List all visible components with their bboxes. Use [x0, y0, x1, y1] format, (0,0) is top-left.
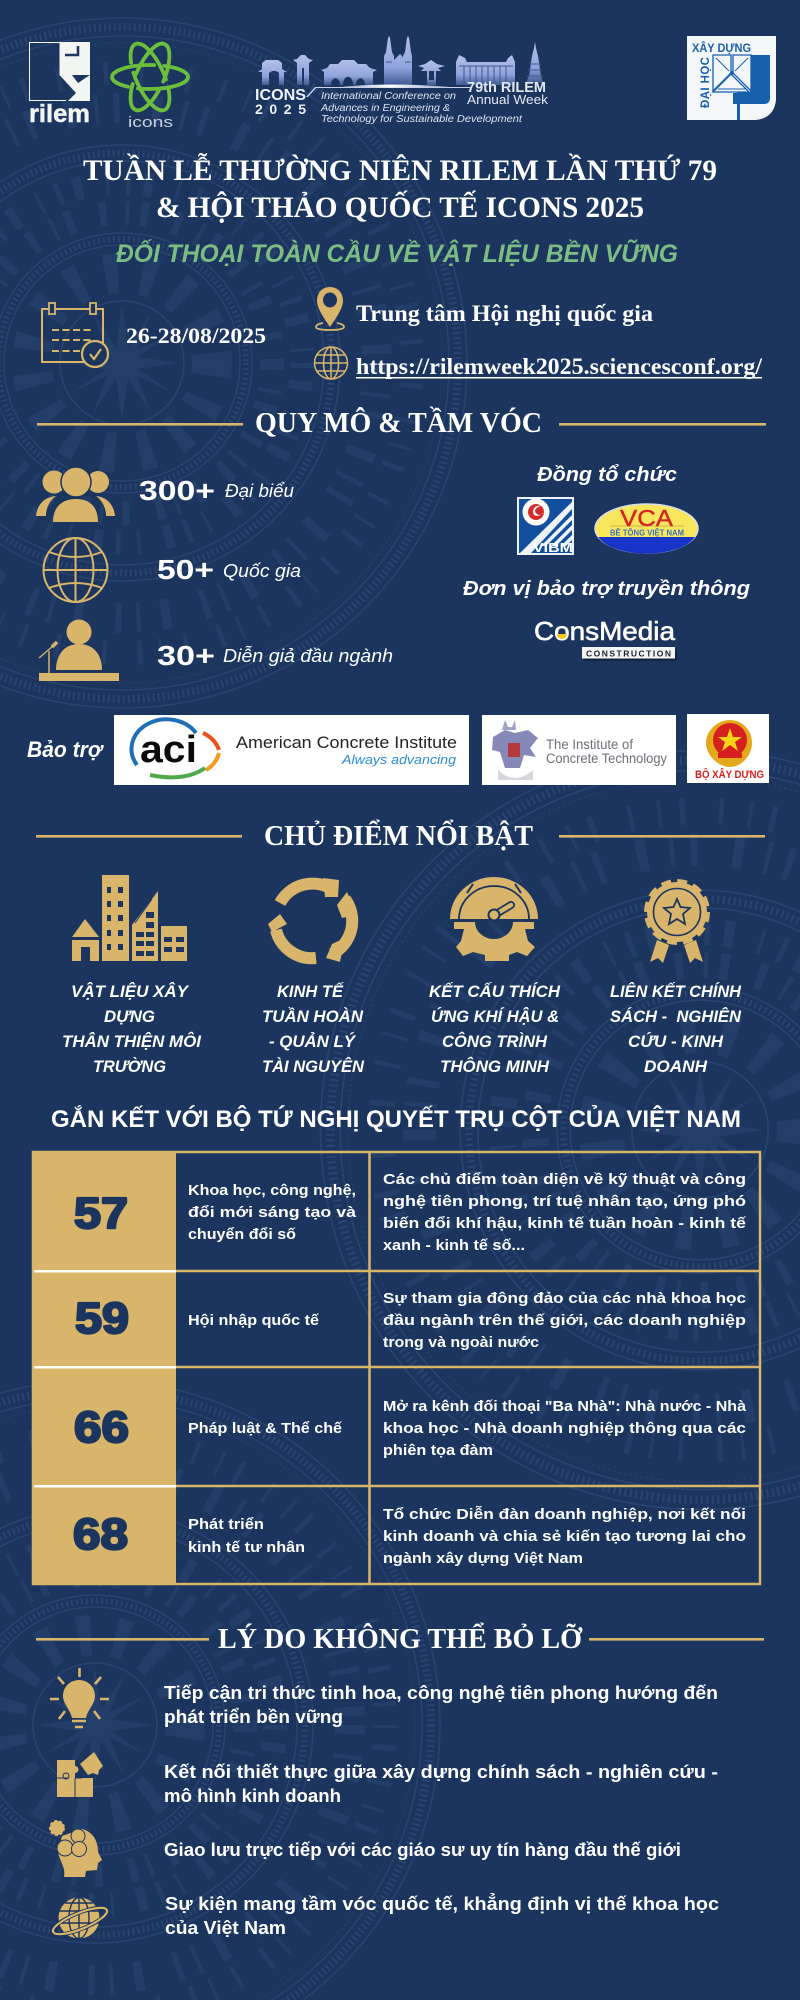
- row: resolution 57: 57: [74, 1189, 128, 1238]
- theme: climate-adaptive structures: KẾT CẤU THÍCH: [429, 982, 561, 1001]
- row: resolution 68: kinh tế tư nhân: [188, 1539, 305, 1556]
- reason: knowledge: [50, 1668, 718, 1727]
- logo: Đại học Xây dựng: [687, 36, 776, 120]
- icon: people: [36, 467, 115, 522]
- title: & HỘI THẢO QUỐC TẾ ICONS 2025: [156, 190, 644, 224]
- row: resolution 57: nghệ tiên phong, trí tuệ nhân tạo, ứng phó: [383, 1193, 746, 1210]
- row: resolution 66: Mở ra kênh đối thoại "Ba Nhà": Nhà nước - Nhà: [383, 1398, 747, 1415]
- stat: 30+ speakers: Diễn giả đầu ngành: [223, 646, 393, 666]
- logo: ICONS 2025 and 79th RILEM Annual Week: Advances in Engineering &: [320, 103, 450, 114]
- icon: location pin: [316, 287, 344, 330]
- logo: ICONS 2025 and 79th RILEM Annual Week: 2025: [255, 101, 306, 117]
- heading: four pillar resolutions: GẮN KẾT VỚI BỘ TỨ NGHỊ QUYẾT TRỤ CỘT CỦA VIỆT NAM: [51, 1104, 741, 1133]
- logo: ConsMedia: ConsMedia: [534, 616, 676, 646]
- row: resolution 68: 68: [73, 1510, 128, 1559]
- logo: Bộ Xây dựng: [687, 714, 769, 783]
- stat: 50+ countries: Quốc gia: [223, 561, 301, 581]
- logo: ICONS 2025 and 79th RILEM Annual Week: ICONS: [255, 87, 306, 104]
- row: resolution 57: xanh - kinh tế số...: [383, 1237, 525, 1254]
- theme: policy, research, business links: CỨU - KINH: [628, 1032, 724, 1051]
- row: resolution 57: [74, 1171, 747, 1254]
- logo: ICONS 2025 and 79th RILEM Annual Week: 79th RILEM: [467, 79, 546, 96]
- title: TUẦN LỄ THƯỜNG NIÊN RILEM LẦN THỨ 79: [83, 153, 717, 187]
- theme: green building materials: VẬT LIỆU XÂY: [71, 982, 190, 1001]
- theme: circular economy: - QUẢN LÝ: [269, 1032, 357, 1051]
- theme: circular economy: [262, 878, 365, 1076]
- logo: American Concrete Institute: [114, 715, 469, 785]
- theme: climate-adaptive structures: THÔNG MINH: [440, 1057, 550, 1076]
- row: resolution 68: ngành xây dựng Việt Nam: [383, 1550, 583, 1567]
- logo: Bộ Xây dựng: BỘ XÂY DỰNG: [695, 768, 764, 781]
- logo: ConsMedia: CONSTRUCTION: [586, 648, 671, 658]
- logo: Đại học Xây dựng: XÂY DỰNG: [692, 40, 751, 55]
- row: resolution 57: đổi mới sáng tạo và: [188, 1204, 357, 1221]
- logo: Institute of Concrete Technology: The Institute of: [546, 737, 633, 752]
- table: resolutions: [32, 1151, 760, 1585]
- stat: 300+ delegates: 300+: [139, 475, 215, 506]
- theme: policy, research, business links: [610, 881, 742, 1076]
- logo: VCA: BÊ TÔNG VIỆT NAM: [610, 528, 684, 538]
- venue: Trung tâm Hội nghị quốc gia: [356, 301, 654, 326]
- theme: green building materials: DỰNG: [104, 1008, 155, 1026]
- stat: 50+ countries: [44, 538, 301, 602]
- reason: connections: [57, 1752, 718, 1806]
- logo: Institute of Concrete Technology: [482, 715, 676, 785]
- row: resolution 59: Hội nhập quốc tế: [188, 1312, 320, 1329]
- section heading: Lý do không thể bỏ lỡ: LÝ DO KHÔNG THỂ BỎ LỠ: [218, 1623, 583, 1655]
- row: resolution 59: trong và ngoài nước: [383, 1334, 539, 1351]
- section heading: Chủ điểm nổi bật: CHỦ ĐIỂM NỔI BẬT: [264, 820, 533, 852]
- reason: international stature: Sự kiện mang tầm vóc quốc tế, khẳng định vị thế khoa học: [165, 1893, 719, 1914]
- icon: puzzle: [57, 1752, 103, 1797]
- event date: 26-28/08/2025: [126, 323, 266, 348]
- section heading: Quy mô & tầm vóc: QUY MÔ & TẦM VÓC: [255, 407, 542, 439]
- theme: climate-adaptive structures: CÔNG TRÌNH: [442, 1032, 548, 1051]
- reason: knowledge: Tiếp cận tri thức tinh hoa, công nghệ tiên phong hướng đến: [164, 1682, 718, 1703]
- row: resolution 68: Tổ chức Diễn đàn doanh nghiệp, nơi kết nối: [383, 1506, 746, 1523]
- row: resolution 68: kinh doanh và chia sẻ kiến tạo tương lai cho: [383, 1528, 746, 1545]
- logo: ICONS 2025 and 79th RILEM Annual Week: Annual Week: [467, 92, 549, 107]
- heading: media partner: Đơn vị bảo trợ truyền thông: [463, 578, 750, 600]
- theme: circular economy: KINH TẾ: [277, 982, 344, 1001]
- row: resolution 66: phiên tọa đàm: [383, 1442, 493, 1459]
- theme: circular economy: TUẦN HOÀN: [262, 1007, 364, 1026]
- logo: American Concrete Institute: aci: [140, 729, 197, 771]
- stat: 50+ countries: 50+: [157, 554, 214, 585]
- heading: co-organizers: Đồng tổ chức: [537, 464, 677, 486]
- theme: climate-adaptive structures: ỨNG KHÍ HẬU &: [431, 1007, 559, 1026]
- title: [83, 153, 717, 224]
- icon: gauge and gear: [450, 877, 538, 961]
- reason: connections: Kết nối thiết thực giữa xây dựng chính sách - nghiên cứu -: [164, 1761, 718, 1782]
- logo: RILEM: rilem: [29, 100, 90, 128]
- icon: award medal: [646, 881, 708, 963]
- logo: Đại học Xây dựng: ĐẠI HỌC: [700, 57, 712, 108]
- logo: Institute of Concrete Technology: Concrete Technology: [546, 751, 667, 766]
- stat: 300+ delegates: [36, 467, 294, 522]
- row: resolution 66: khoa học - Nhà doanh nghiệp thông qua các: [383, 1420, 746, 1437]
- reason: connections: mô hình kinh doanh: [164, 1785, 341, 1806]
- row: resolution 68: Phát triển: [188, 1516, 264, 1533]
- theme: green building materials: THÂN THIỆN MÔI: [62, 1032, 201, 1051]
- reason: international stature: [49, 1893, 719, 1940]
- row: resolution 59: 59: [75, 1294, 129, 1343]
- logo: ConsMedia: [534, 616, 677, 661]
- row: resolution 57: Các chủ điểm toàn diện về kỹ thuật và công: [383, 1171, 746, 1188]
- row: resolution 59: đầu ngành trên thế giới, các doanh nghiệp: [383, 1312, 746, 1329]
- theme: green building materials: [62, 875, 201, 1076]
- theme: circular economy: TÀI NGUYÊN: [262, 1057, 365, 1076]
- theme: policy, research, business links: DOANH: [644, 1058, 708, 1076]
- logo: ICONS 2025 and 79th RILEM Annual Week: International Conference on: [321, 91, 456, 102]
- logo: RILEM: [29, 42, 90, 128]
- icon: light bulb: [50, 1668, 109, 1727]
- row: resolution 68: [73, 1506, 746, 1567]
- logo: ICONS 2025 and 79th RILEM Annual Week: [255, 36, 549, 125]
- row: resolution 57: chuyển đổi số: [188, 1226, 296, 1243]
- logo: VIBM: [517, 497, 574, 555]
- row: resolution 59: [75, 1290, 746, 1351]
- logo: American Concrete Institute: American Concrete Institute: [236, 733, 457, 752]
- icon: web globe: [314, 347, 348, 379]
- theme: policy, research, business links: LIÊN KẾT CHÍNH: [610, 982, 742, 1001]
- icon: calendar: [42, 303, 108, 367]
- row: resolution 57: biến đổi khí hậu, kinh tế tuần hoàn - kinh tế: [383, 1215, 747, 1232]
- label: patrons: Bảo trợ: [27, 737, 104, 762]
- reason: professors: [50, 1821, 681, 1877]
- logo: VCA: VCA: [620, 505, 674, 531]
- subtitle: ĐỐI THOẠI TOÀN CẦU VỀ VẬT LIỆU BỀN VỮNG: [116, 238, 678, 268]
- reason: professors: Giao lưu trực tiếp với các giáo sư uy tín hàng đầu thế giới: [164, 1839, 681, 1860]
- theme: green building materials: TRƯỜNG: [93, 1057, 166, 1076]
- row: resolution 66: [74, 1398, 747, 1459]
- logo: VIBM: VIBM: [533, 540, 573, 555]
- row: resolution 66: Pháp luật & Thể chế: [188, 1420, 343, 1437]
- logo: VCA: [595, 504, 698, 554]
- website url: https://rilemweek2025.sciencesconf.org/: [356, 354, 763, 379]
- theme: policy, research, business links: SÁCH - NGHIÊN: [610, 1007, 742, 1026]
- stat: 30+ speakers: [39, 620, 393, 681]
- reason: knowledge: phát triển bền vững: [164, 1706, 343, 1727]
- icon: globe with orbit: [49, 1898, 111, 1940]
- row: resolution 66: 66: [74, 1403, 129, 1452]
- reason: international stature: của Việt Nam: [165, 1917, 286, 1938]
- icon: head with gears: [50, 1821, 102, 1877]
- logo: American Concrete Institute: Always advancing: [341, 752, 457, 767]
- stat: 30+ speakers: 30+: [157, 640, 215, 671]
- logo: ICONS: [112, 38, 188, 131]
- logo: ICONS: icons: [128, 114, 173, 131]
- row: resolution 57: Khoa học, công nghệ,: [188, 1182, 356, 1199]
- icon: speaker at lectern: [39, 620, 119, 681]
- icon: circular arrows: [268, 878, 357, 962]
- stat: 300+ delegates: Đại biểu: [225, 481, 294, 501]
- icon: buildings: [72, 875, 187, 961]
- logo: ICONS 2025 and 79th RILEM Annual Week: Technology for Sustainable Development: [321, 114, 523, 125]
- theme: climate-adaptive structures: [429, 877, 561, 1076]
- row: resolution 59: Sự tham gia đông đảo của các nhà khoa học: [383, 1290, 746, 1307]
- icon: globe: [44, 538, 108, 602]
